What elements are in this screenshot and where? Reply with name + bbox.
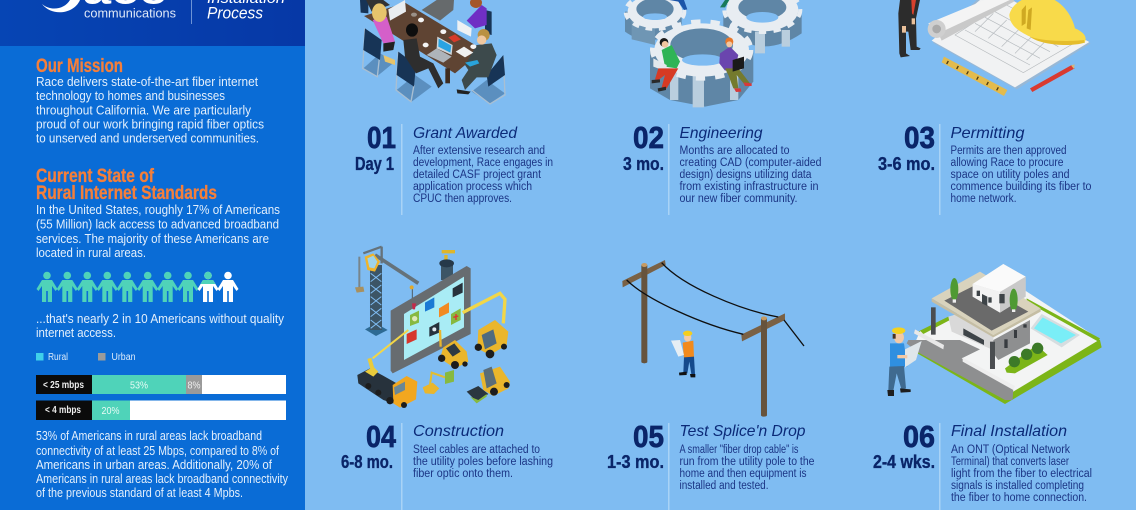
step 05: Test Splice'n Drop: home and then equipment is xyxy=(680,468,807,480)
header: Process: Process xyxy=(207,4,263,22)
step 06: Final Installation: 06 xyxy=(903,419,935,454)
step 05: Test Splice'n Drop: 05 xyxy=(633,419,664,454)
logo: Race swoosh xyxy=(42,0,80,12)
bar chart: < 4 mbps xyxy=(45,405,81,416)
broadband text: 53% of Americans in rural areas lack broadband xyxy=(36,429,262,443)
broadband text: connectivity of at least 25 Mbps, compared to 8% of xyxy=(36,444,279,458)
broadband text: Americans in urban areas. Additionally, 20% of xyxy=(36,458,272,472)
heading: Current State of Rural Internet Standards: Rural Internet Standards xyxy=(36,183,217,204)
mission text: Race delivers state-of-the-art fiber internet xyxy=(36,75,258,89)
broadband text: Americans in rural areas lack broadband connectivity xyxy=(36,472,289,486)
mission text: to unserved and underserved communities. xyxy=(36,132,259,146)
step 03: Permitting: commence building its fiber to xyxy=(950,181,1092,193)
step 01: Grant Awarded: development, Race engages in xyxy=(413,157,553,169)
legend: Rural xyxy=(48,352,68,363)
step 01: Grant Awarded: application process which xyxy=(413,181,532,193)
step 03: Permitting: 03 xyxy=(904,120,935,155)
bar chart: 53% xyxy=(130,380,148,392)
step 02: Engineering: our new fiber community. xyxy=(680,193,798,205)
rural internet text: In the United States, roughly 17% of Americans xyxy=(36,203,280,217)
step 01: Grant Awarded: 01 xyxy=(367,120,396,155)
pictogram caption: internet access. xyxy=(36,326,116,340)
step 01: Grant Awarded: Grant Awarded xyxy=(413,125,518,142)
logo: communications: communications xyxy=(84,6,176,20)
legend xyxy=(36,352,136,363)
step 01: Grant Awarded: CPUC then approves. xyxy=(413,193,512,205)
illustration: finished house with worker xyxy=(887,264,1102,404)
step 04: Construction xyxy=(341,419,553,510)
bar chart: 20% xyxy=(102,405,120,417)
illustration: permit plans and hard hat xyxy=(898,0,1091,96)
bar chart: 8% xyxy=(188,380,200,392)
mission text: throughout California. We are particularly xyxy=(36,104,252,118)
step 06: Final Installation: signals is installed completing xyxy=(951,480,1084,492)
step 02: Engineering: 3 mo. xyxy=(623,154,664,174)
step 02: Engineering: Months are allocated to xyxy=(680,145,790,157)
step 01: Grant Awarded: Day 1 xyxy=(355,154,394,174)
mission text xyxy=(36,75,264,146)
step 05: Test Splice'n Drop: A smaller "fiber drop cable" is xyxy=(680,444,799,456)
step 04: Construction: Steel cables are attached to xyxy=(413,444,540,456)
step 01: Grant Awarded: After extensive research and xyxy=(413,145,545,157)
header band with logo xyxy=(0,0,305,46)
step 05: Test Splice'n Drop xyxy=(607,419,814,510)
step 02: Engineering: design) designs utilizing data xyxy=(680,169,812,181)
step 02: Engineering: Engineering xyxy=(680,125,763,142)
step 04: Construction: Construction xyxy=(413,423,504,440)
step 03: Permitting: allowing Race to procure xyxy=(950,157,1064,169)
step 04: Construction: 6-8 mo. xyxy=(341,452,393,472)
rural internet text: located in rural areas. xyxy=(36,246,146,260)
heading: Current State of Rural Internet Standards xyxy=(36,166,217,204)
step 06: Final Installation: 2-4 wks. xyxy=(873,452,935,472)
step 05: Test Splice'n Drop: run from the utility pole to the xyxy=(680,456,814,468)
heading: Current State of Rural Internet Standards: Current State of xyxy=(36,166,155,187)
step 03: Permitting: Permits are then approved xyxy=(950,145,1066,157)
step 02: Engineering: creating CAD (computer-aided xyxy=(680,157,822,169)
step 02: Engineering: 02 xyxy=(633,120,664,155)
header divider xyxy=(191,0,192,24)
step 04: Construction: 04 xyxy=(366,419,397,454)
step 06: Final Installation: light from the fiber to electrical xyxy=(951,468,1092,480)
rural internet text: (55 Million) lack access to advanced broadband xyxy=(36,218,279,232)
step 03: Permitting xyxy=(878,120,1092,215)
step 06: Final Installation: An ONT (Optical Network xyxy=(951,444,1070,456)
illustration: utility poles and worker xyxy=(622,260,804,417)
step 01: Grant Awarded: detailed CASF project grant xyxy=(413,169,542,181)
mission text: proud of our work bringing rapid fiber optics xyxy=(36,118,264,132)
step 04: Construction: the utility poles before lashing xyxy=(413,456,553,468)
illustration: meeting at table xyxy=(360,0,505,104)
step 01: Grant Awarded xyxy=(355,120,553,215)
illustration: gears and engineers xyxy=(625,0,802,107)
bar chart xyxy=(36,375,286,420)
step 03: Permitting: 3-6 mo. xyxy=(878,154,935,174)
illustration: construction crew building tablet xyxy=(355,247,510,408)
step 03: Permitting: home network. xyxy=(950,193,1016,205)
step 05: Test Splice'n Drop: Test Splice'n Drop xyxy=(680,423,806,440)
rural internet text xyxy=(36,203,280,260)
pictogram caption xyxy=(36,312,285,340)
step 03: Permitting: space on utility poles and xyxy=(950,169,1070,181)
heading: Our Mission: Our Mission xyxy=(36,56,123,77)
step 04: Construction: fiber optic onto them. xyxy=(413,468,513,480)
broadband text: of the previous standard of at least 4 Mpbs. xyxy=(36,486,243,500)
step 05: Test Splice'n Drop: installed and tested. xyxy=(680,480,768,492)
mission text: technology to homes and businesses xyxy=(36,89,225,103)
rural internet text: services. The majority of these Americans are xyxy=(36,232,269,246)
step 06: Final Installation xyxy=(873,419,1092,510)
step 06: Final Installation: the fiber to home connection. xyxy=(951,492,1087,504)
left sidebar panel xyxy=(0,0,305,510)
bar chart: < 25 mbps xyxy=(43,380,84,391)
broadband text xyxy=(36,429,289,500)
step 05: Test Splice'n Drop: 1-3 mo. xyxy=(607,452,664,472)
step 02: Engineering xyxy=(623,120,822,215)
step 03: Permitting: Permitting xyxy=(950,125,1025,142)
step 06: Final Installation: Terminal) that converts laser xyxy=(951,456,1069,468)
pictogram caption: ...that's nearly 2 in 10 Americans without quality xyxy=(36,312,285,326)
pictogram: 2 in 10 Americans xyxy=(36,272,238,302)
step 02: Engineering: from existing infrastructure in xyxy=(680,181,818,193)
step 06: Final Installation: Final Installation xyxy=(951,423,1067,440)
legend: Urban xyxy=(112,352,136,363)
